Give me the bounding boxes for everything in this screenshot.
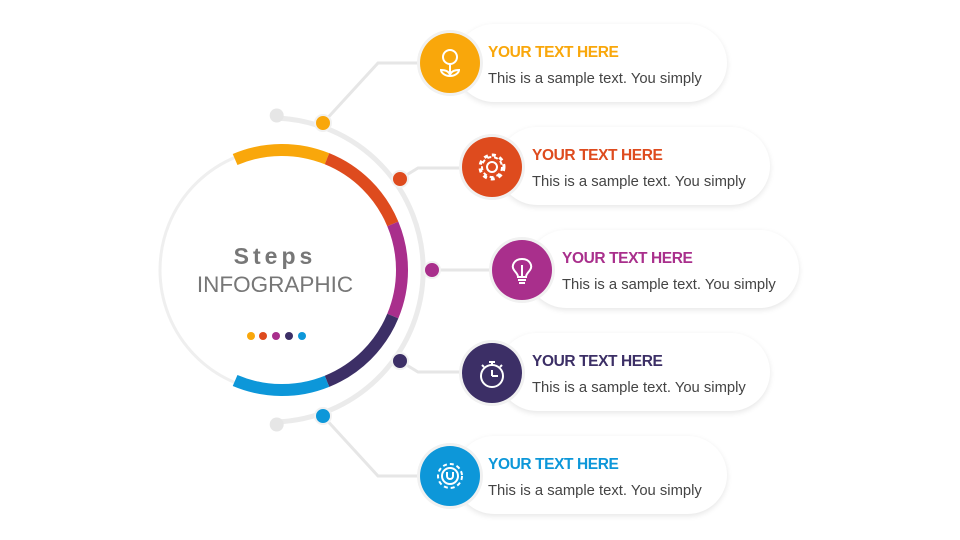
card 3	[527, 230, 799, 308]
icon: brain bulb	[492, 240, 552, 300]
card 2: This is a sample text. You simply	[532, 174, 746, 190]
title text	[197, 243, 353, 297]
icon: gear	[462, 137, 522, 197]
card 2: YOUR TEXT HERE	[532, 147, 662, 164]
card 4: YOUR TEXT HERE	[532, 353, 662, 370]
central white circle	[160, 148, 404, 392]
colored dots on arc	[315, 115, 440, 424]
grey outer arc	[270, 108, 423, 432]
card 3: This is a sample text. You simply	[562, 277, 776, 293]
icon: money plant	[420, 33, 480, 93]
card 5: This is a sample text. You simply	[488, 483, 702, 499]
card 5: YOUR TEXT HERE	[488, 456, 618, 473]
card 1: This is a sample text. You simply	[488, 71, 702, 87]
card 1: YOUR TEXT HERE	[488, 44, 618, 61]
colored ring segments	[235, 150, 402, 390]
card 1	[455, 24, 727, 102]
icon: gear wrench	[420, 446, 480, 506]
card 2	[498, 127, 770, 205]
title text: Steps	[234, 243, 316, 269]
title text: INFOGRAPHIC	[197, 272, 353, 297]
connector lines	[323, 63, 522, 476]
card 4	[498, 333, 770, 411]
card 3: YOUR TEXT HERE	[562, 250, 692, 267]
card 5	[455, 436, 727, 514]
small color dots	[247, 332, 306, 340]
card 4: This is a sample text. You simply	[532, 380, 746, 396]
icon: stopwatch	[462, 343, 522, 403]
